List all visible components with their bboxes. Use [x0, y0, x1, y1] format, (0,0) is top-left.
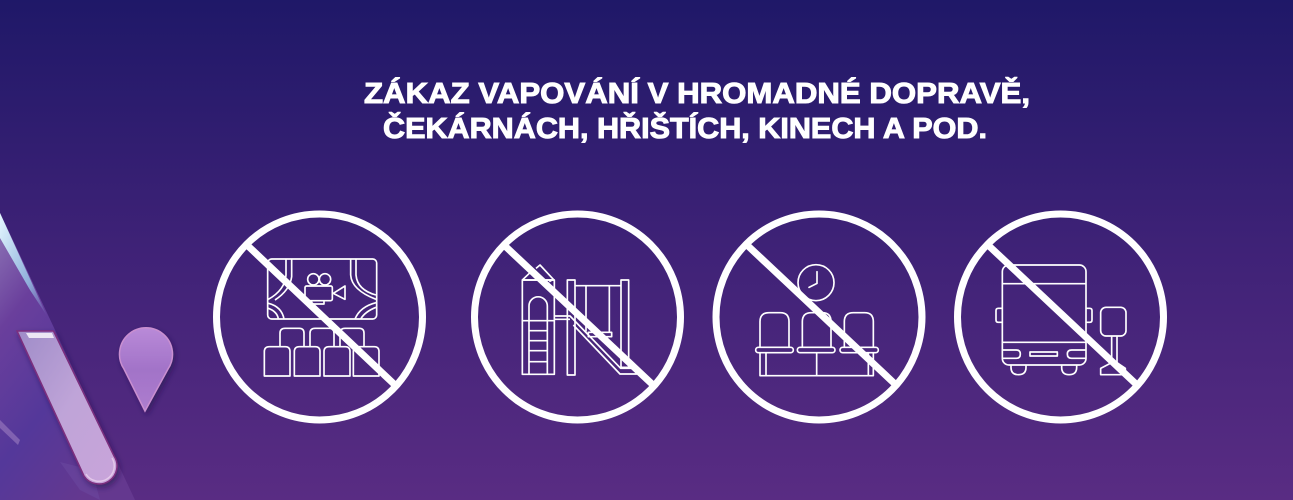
- waiting room clock and seats: [756, 265, 878, 376]
- playground structure: [522, 265, 637, 375]
- icon: no vaping in waiting room: [716, 214, 922, 420]
- title: [364, 76, 1030, 145]
- cinema screen and seats: [264, 259, 379, 376]
- prohibition sign: bus: [958, 214, 1164, 420]
- prohibition sign: playground: [474, 214, 680, 420]
- decorative glass shard, bottom left: [0, 213, 135, 500]
- icon: no vaping on bus: [958, 214, 1164, 420]
- decorative pink tube: [17, 331, 117, 484]
- prohibition sign: cinema: [216, 214, 422, 420]
- icon: no vaping on playground: [474, 214, 680, 420]
- title: ZÁKAZ VAPOVÁNÍ V HROMADNÉ DOPRAVĚ,: [364, 76, 1030, 110]
- prohibition sign: waiting room: [716, 214, 922, 420]
- icon: no vaping in cinema: [216, 214, 422, 420]
- decorative purple drop: [119, 328, 172, 411]
- bus and bus stop: [996, 265, 1126, 375]
- title: ČEKÁRNÁCH, HŘIŠTÍCH, KINECH A POD.: [383, 111, 987, 145]
